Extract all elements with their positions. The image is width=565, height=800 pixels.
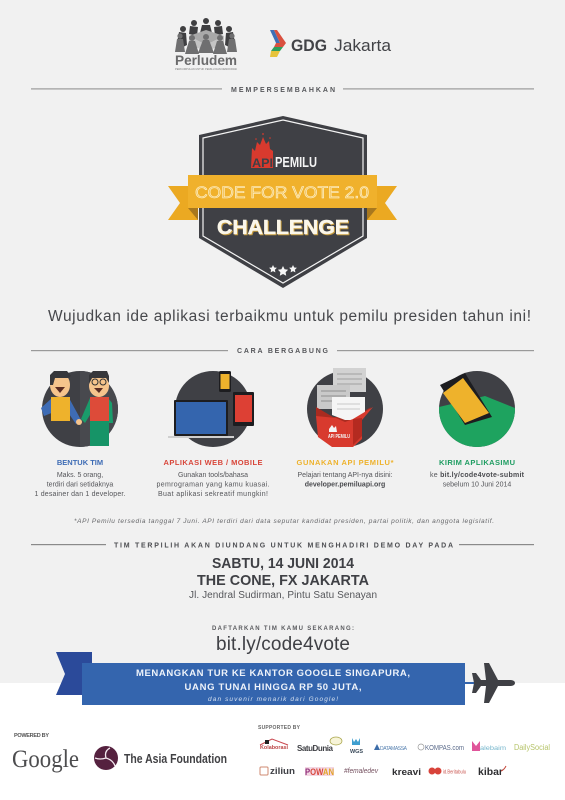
step description xyxy=(156,472,270,498)
step 3: Gunakan API Pemilu xyxy=(296,368,394,488)
supporter logos row 2: id.Beritabulu xyxy=(443,770,466,776)
step description: terdiri dari setidaknya xyxy=(47,482,113,488)
step 2: Aplikasi Web / Mobile xyxy=(156,371,270,498)
step description xyxy=(298,472,393,488)
supporter logos row 1: DailySocial xyxy=(514,743,550,752)
ribbon fold shadows xyxy=(188,208,377,220)
ribbon title: CODE FOR VOTE 2.0 xyxy=(195,184,369,202)
supporter logos row 2: ziliun xyxy=(270,766,295,776)
logo: API Pemilu: PEMILU xyxy=(275,154,317,171)
step description: ke bit.ly/code4vote-submit xyxy=(430,472,525,479)
icon: phone entering ballot slot xyxy=(439,371,515,447)
logo: The Asia Foundation xyxy=(94,746,227,770)
supporter logos row 2 xyxy=(260,766,506,778)
tagline: Wujudkan ide aplikasi terbaikmu untuk pemilu presiden tahun ini! xyxy=(48,308,531,325)
registration call to action: bit.ly/code4vote xyxy=(216,634,350,655)
supporter logos row 2: #femaledev xyxy=(344,766,379,775)
footnote: *API Pemilu tersedia tanggal 7 Juni. API terdiri dari data seputar kandidat presiden, partai politik, dan anggota legislatif. xyxy=(74,518,494,525)
step 1: Bentuk Tim xyxy=(34,371,126,498)
registration call to action: DAFTARKAN TIM KAMU SEKARANG: xyxy=(212,626,354,632)
supporters xyxy=(258,725,550,778)
powered by sponsors xyxy=(12,733,227,773)
event details xyxy=(189,555,377,601)
step title: KIRIM APLIKASIMU xyxy=(439,458,515,467)
section heading: Cara Bergabung: CARA BERGABUNG xyxy=(237,348,329,355)
ribbon tails xyxy=(168,186,397,220)
prize banner: MENANGKAN TUR KE KANTOR GOOGLE SINGAPURA, xyxy=(136,668,410,679)
logo: API Pemilu: API xyxy=(252,156,273,170)
logo: Google: Google xyxy=(12,746,79,773)
event details: SABTU, 14 JUNI 2014 xyxy=(212,555,355,572)
logo: API Pemilu xyxy=(251,133,317,171)
step description: developer.pemiluapi.org xyxy=(305,482,385,488)
section heading: Mempersembahkan: MEMPERSEMBAHKAN xyxy=(231,87,335,94)
registration call to action xyxy=(212,626,354,655)
shield xyxy=(199,116,367,288)
supporter logos row 1: KOMPAS.com xyxy=(425,743,464,752)
logo: Perludem: PERKUMPULAN UNTUK PEMILU DAN DEMOKRASI xyxy=(175,67,237,71)
logo: GDG Jakarta xyxy=(270,30,392,57)
step 4: Kirim Aplikasimu xyxy=(430,371,525,488)
step description: Pelajari tentang API-nya disini: xyxy=(298,472,393,479)
logo: GDG Jakarta: Jakarta xyxy=(334,36,392,55)
stars xyxy=(269,265,297,276)
icon: laptop, phone, tablet xyxy=(168,371,254,447)
logo: GDG Jakarta: GDG xyxy=(291,36,327,55)
supporter logos row 1 xyxy=(260,737,550,755)
supporter logos row 1: SatuDunia xyxy=(297,744,334,753)
supporter logos row 1: WGS xyxy=(350,749,363,755)
ribbon band xyxy=(188,175,377,208)
supporter logos row 2: POWAN xyxy=(305,767,334,777)
supporter logos row 2: kreavi xyxy=(392,767,421,778)
icon: API box with documents: API PEMILU xyxy=(328,434,350,440)
supporters: SUPPORTED BY xyxy=(258,725,301,731)
step description: Maks. 5 orang, xyxy=(57,472,103,479)
step title: BENTUK TIM xyxy=(57,458,103,467)
challenge label: CHALLENGE xyxy=(218,218,350,240)
badge: Code for Vote 2.0 Challenge xyxy=(168,116,397,288)
supporter logos row 2: kibar xyxy=(478,767,503,778)
icon: airplane xyxy=(465,663,515,703)
section heading: Demo Day: TIM TERPILIH AKAN DIUNDANG UNTUK MENGHADIRI DEMO DAY PADA xyxy=(114,542,453,550)
supporter logos row 1: DATAMASSA xyxy=(380,746,408,752)
step description xyxy=(430,472,525,488)
icon: two team members xyxy=(41,371,118,447)
supporter logos row 1: alebaim xyxy=(480,745,506,752)
prize banner: dan suvenir menarik dari Google! xyxy=(208,696,338,703)
step description: sebelum 10 Juni 2014 xyxy=(443,482,511,488)
logo: Perludem xyxy=(175,18,237,71)
step description: Buat aplikasi sekreatif mungkin! xyxy=(158,491,268,498)
supporter logos row 1: Kolaborasi xyxy=(260,745,289,751)
prize banner xyxy=(56,652,465,705)
event details: Jl. Jendral Sudirman, Pintu Satu Senayan xyxy=(189,590,377,601)
powered by sponsors: POWERED BY xyxy=(14,733,49,739)
event details: THE CONE, FX JAKARTA xyxy=(197,572,369,589)
logo: The Asia Foundation: The Asia Foundation xyxy=(124,751,227,766)
step title: APLIKASI WEB / MOBILE xyxy=(164,458,262,467)
prize banner: UANG TUNAI HINGGA RP 50 JUTA, xyxy=(184,682,362,693)
logo: Perludem: Perludem xyxy=(175,52,237,68)
step title: GUNAKAN API PEMILU* xyxy=(296,458,394,467)
challenge label: CHALLENGE xyxy=(217,217,349,239)
step description: pemrograman yang kamu kuasai. xyxy=(156,482,270,488)
step description xyxy=(34,472,126,498)
step description: Gunakan tools/bahasa xyxy=(178,472,248,479)
step description: 1 desainer dan 1 developer. xyxy=(34,491,126,498)
